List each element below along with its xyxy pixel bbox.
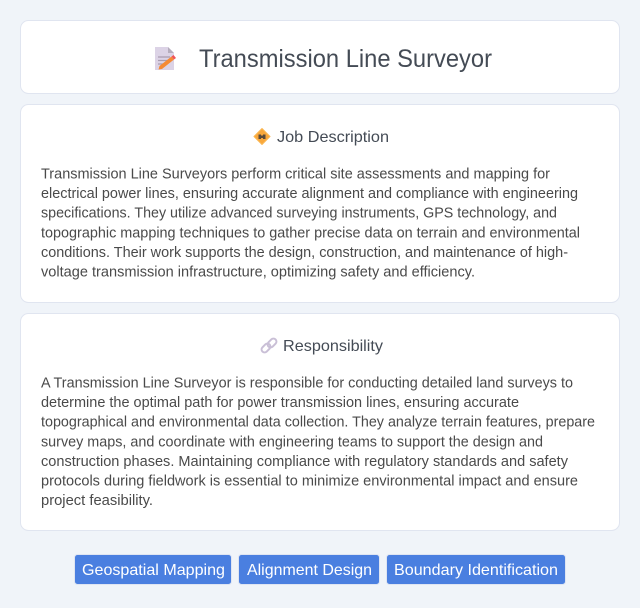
tag: alignment design: Alignment Design xyxy=(247,562,372,579)
icon: memo with pencil xyxy=(155,47,176,70)
tag: boundary identification: Boundary Identification xyxy=(394,562,558,579)
text block: job description: conditions. Their work supports the design, construction, and maintenance of high- xyxy=(41,245,568,261)
panel: title xyxy=(20,20,620,94)
icon: orange diamond xyxy=(254,128,270,144)
panel: responsibility xyxy=(20,314,620,530)
text block: responsibility xyxy=(41,376,595,509)
text block: responsibility: survey maps, and coordinate with engineering teams to support the design and xyxy=(41,434,543,450)
heading: responsibility: Responsibility xyxy=(283,338,383,355)
text block: responsibility: determine the optimal path for power transmission lines, ensuring accurate xyxy=(41,395,519,411)
text block: responsibility: construction phases. Maintaining compliance with regulatory standards and safety xyxy=(41,454,569,470)
heading: job description: Job Description xyxy=(277,129,389,146)
icon: chain link xyxy=(260,337,278,354)
text block: job description: Transmission Line Surveyors perform critical site assessments and mapping for xyxy=(41,166,550,182)
panel: job description xyxy=(20,104,620,302)
text block: responsibility: topographical and environmental data collection. They analyze terrain features, prepare xyxy=(41,415,595,431)
text block: responsibility: project feasibility. xyxy=(41,493,153,509)
tag: geospatial mapping: Geospatial Mapping xyxy=(82,562,225,579)
text block: job description xyxy=(41,166,580,280)
text block: responsibility: A Transmission Line Surveyor is responsible for conducting detailed land surveys to xyxy=(41,376,573,392)
text block: responsibility: protocols during fieldwork is essential to minimize environmental impact and ensure xyxy=(41,474,578,490)
tag: boundary identification xyxy=(386,554,566,584)
tag: alignment design xyxy=(238,554,380,584)
text block: job description: topographic mapping techniques to gather precise data on terrain and environmental xyxy=(41,225,580,241)
text block: job description: specifications. They utilize advanced surveying instruments, GPS technology, and xyxy=(41,206,557,222)
text block: job description: voltage transmission infrastructure, optimizing safety and efficiency. xyxy=(41,264,475,280)
tag: geospatial mapping xyxy=(74,554,232,584)
text block: job description: electrical power lines, ensuring accurate alignment and compliance with engineering xyxy=(41,186,578,202)
heading: title text: Transmission Line Surveyor xyxy=(199,45,492,73)
